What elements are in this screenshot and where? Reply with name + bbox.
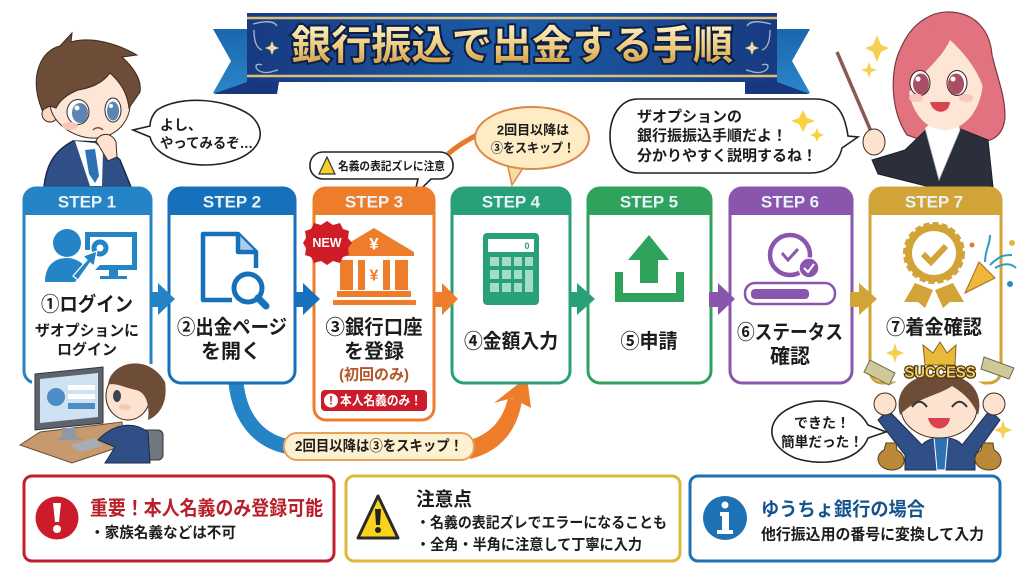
monitor avatar (47, 388, 65, 406)
panel: step 1 (23, 187, 151, 383)
eye right (105, 98, 121, 122)
panel: caution: ・全角・半角に注意して丁寧に入力 (416, 536, 642, 554)
skip pill: 2回目以降は③をスキップ！ (295, 438, 463, 455)
step 7 header (869, 187, 1002, 215)
step 1 label: STEP 1 (58, 192, 116, 212)
white backing (20, 364, 170, 463)
right banner ornaments (746, 22, 771, 73)
speech bubble: boy: やってみるぞ… (160, 135, 253, 151)
panel heading: 注意点 (416, 488, 472, 510)
step 7 label: STEP 7 (905, 192, 963, 212)
first time note: (初回のみ) (339, 366, 409, 384)
speech bubble: success: 簡単だった！ (781, 434, 863, 450)
body (98, 425, 150, 463)
panel: step 6: 確認 (770, 345, 810, 368)
mouth (93, 128, 103, 130)
step 5 label: STEP 5 (620, 192, 678, 212)
icon: bank (333, 228, 416, 305)
hair (108, 363, 166, 420)
callout text: 名義の表記ズレに注意 (338, 159, 445, 173)
panel text: ・名義の表記ズレでエラーになることも (416, 514, 667, 532)
step 6 label: STEP 6 (761, 192, 819, 212)
step 6 title: ⑥ステータス (737, 321, 843, 344)
left ribbon fold (213, 82, 279, 94)
warning icon (319, 157, 335, 174)
suit (44, 141, 131, 187)
step 2 title: ②出金ページ (177, 316, 287, 339)
icon: party popper (965, 235, 1016, 293)
character: thinking boy (36, 33, 140, 187)
step 4 header (451, 187, 571, 215)
title text: 銀行振込で出金する手順 (291, 24, 733, 68)
face (908, 35, 983, 130)
red label: ! (329, 394, 333, 408)
callout text: 2回目以降は (497, 122, 569, 138)
red label (321, 390, 427, 411)
crown (923, 342, 956, 365)
bubble text: できた！ (794, 415, 850, 431)
shirt (75, 141, 103, 186)
chair (137, 430, 163, 460)
eye left (67, 100, 89, 124)
arrow: step 6 to 7 (850, 283, 877, 315)
shirt (925, 120, 960, 180)
login fields (68, 385, 95, 390)
speech bubble: girl: 分かりやすく説明するね！ (637, 146, 817, 164)
icon: medal (904, 224, 964, 308)
icon: calculator (483, 233, 539, 305)
panel: step 3 (303, 187, 435, 420)
hair (36, 33, 140, 110)
blazer (872, 128, 993, 187)
tie (85, 149, 99, 183)
callout: skip step 3: ③をスキップ！ (491, 140, 575, 156)
sparkle right (994, 420, 1012, 440)
arc arrow: skip blue (236, 383, 290, 447)
red label: 本人名義のみ！ (340, 393, 422, 408)
money bags (878, 443, 1001, 470)
smile (928, 418, 950, 428)
monitor stand (56, 428, 84, 440)
eye right (947, 70, 967, 96)
icon: exclamation (36, 496, 78, 540)
icon: calculator: 0 (524, 241, 530, 251)
ear (42, 106, 58, 122)
blush (909, 94, 923, 102)
step 4 title: ④金額入力 (464, 330, 558, 353)
banner body (247, 13, 777, 82)
bangs (905, 22, 987, 98)
panel heading: 重要！本人名義のみ登録可能 (90, 497, 323, 520)
left sparkle (265, 41, 279, 55)
monitor screen (40, 373, 98, 423)
character: teacher girl (837, 12, 1005, 187)
character: success boy (864, 342, 1014, 470)
icon: upload (615, 235, 684, 302)
panel: step 5 (587, 187, 712, 383)
arrow: step 2 to 3 (295, 283, 320, 315)
step 1 description: ザオプションに (35, 322, 139, 340)
bubble text: ザオプションの (637, 108, 742, 126)
bubble text: よし、 (160, 117, 202, 133)
speech bubble: boy (133, 100, 260, 165)
panel: step 2 (168, 187, 296, 383)
arrow: step 3 to 4 (433, 283, 458, 315)
right ribbon fold (745, 82, 810, 94)
keyboard (70, 438, 103, 452)
panel: important (24, 476, 334, 561)
panel: caution (346, 476, 680, 561)
arrow: step 5 to 6 (709, 283, 735, 315)
face (106, 372, 150, 420)
step 3 label: STEP 3 (345, 192, 403, 212)
step 5 title: ⑤申請 (620, 330, 678, 353)
arrow: step 1 to 2 (150, 283, 175, 315)
blush (62, 122, 78, 130)
step 7 title: ⑦着金確認 (886, 316, 982, 339)
icon: warning triangle (358, 496, 398, 538)
step 3 header (313, 187, 435, 215)
step 1 header (23, 187, 151, 215)
panel text: 他行振込用の番号に変換して入力 (761, 524, 984, 544)
hand on chin (96, 134, 117, 161)
hair (899, 375, 979, 415)
left banner ornaments (253, 22, 278, 73)
icon: login (45, 229, 137, 282)
character: boy at computer (20, 363, 170, 463)
icon: clock and progress (745, 235, 835, 304)
new badge (303, 221, 352, 265)
panel: step 3: を登録 (344, 340, 404, 363)
hair back (893, 12, 1005, 150)
callout: skip step 3 (448, 107, 589, 185)
step 2 label: STEP 2 (203, 192, 261, 212)
step 1 title: ①ログイン (41, 292, 133, 316)
bubble sparkles (791, 110, 824, 142)
speech bubble: success (772, 401, 886, 462)
callout tail (507, 163, 525, 185)
icon: document search (203, 234, 266, 306)
pointer stick (837, 52, 879, 150)
panel: step 2: を開く (201, 340, 261, 363)
icon: info (703, 496, 747, 540)
icon: bank: ¥ (370, 268, 379, 284)
speech bubble: girl (610, 99, 858, 173)
right ribbon (762, 29, 810, 93)
panel: japan post (690, 476, 1000, 561)
arc arrow: skip orange (470, 377, 531, 459)
icon: bank: ¥ (369, 234, 379, 254)
title banner (213, 13, 810, 94)
sparkles near girl (861, 35, 889, 78)
success text: SUCCESS (904, 364, 976, 382)
step 3 title: ③銀行口座 (326, 316, 422, 339)
eye left (910, 70, 930, 96)
right sparkle (745, 41, 759, 55)
callout: name warning (310, 152, 453, 196)
desk (20, 422, 125, 463)
panel text: ・家族名義などは不可 (90, 524, 236, 542)
callout body (475, 107, 589, 169)
suit (878, 410, 1000, 470)
sparkle left (886, 343, 904, 363)
step 5 header (587, 187, 712, 215)
hand (863, 129, 885, 155)
blush (119, 404, 131, 410)
skip pill (284, 433, 474, 460)
money right (981, 357, 1014, 379)
eye (113, 390, 121, 402)
money left (864, 360, 895, 385)
banner gold lines (247, 18, 777, 76)
face (901, 378, 977, 438)
monitor (35, 367, 103, 430)
panel: step 1: ログイン (57, 340, 117, 358)
step 2 header (168, 187, 296, 215)
step 6 header (729, 187, 853, 215)
step 4 label: STEP 4 (482, 192, 541, 212)
new badge: NEW (312, 236, 342, 250)
panel: step 4 (451, 187, 571, 383)
arrow: step 4 to 5 (569, 283, 595, 315)
tie (934, 437, 948, 470)
panel: step 7 (869, 187, 1016, 383)
connector curve (448, 132, 482, 154)
mouth (930, 102, 950, 112)
panel heading: ゆうちょ銀行の場合 (761, 498, 925, 520)
face (50, 70, 130, 138)
panel: step 6 (729, 187, 853, 383)
closed eyes (912, 402, 967, 407)
white backing (870, 380, 1005, 470)
left ribbon (213, 29, 262, 93)
fists (874, 393, 896, 415)
speech bubble: girl: 銀行振振込手順だよ！ (637, 126, 787, 144)
